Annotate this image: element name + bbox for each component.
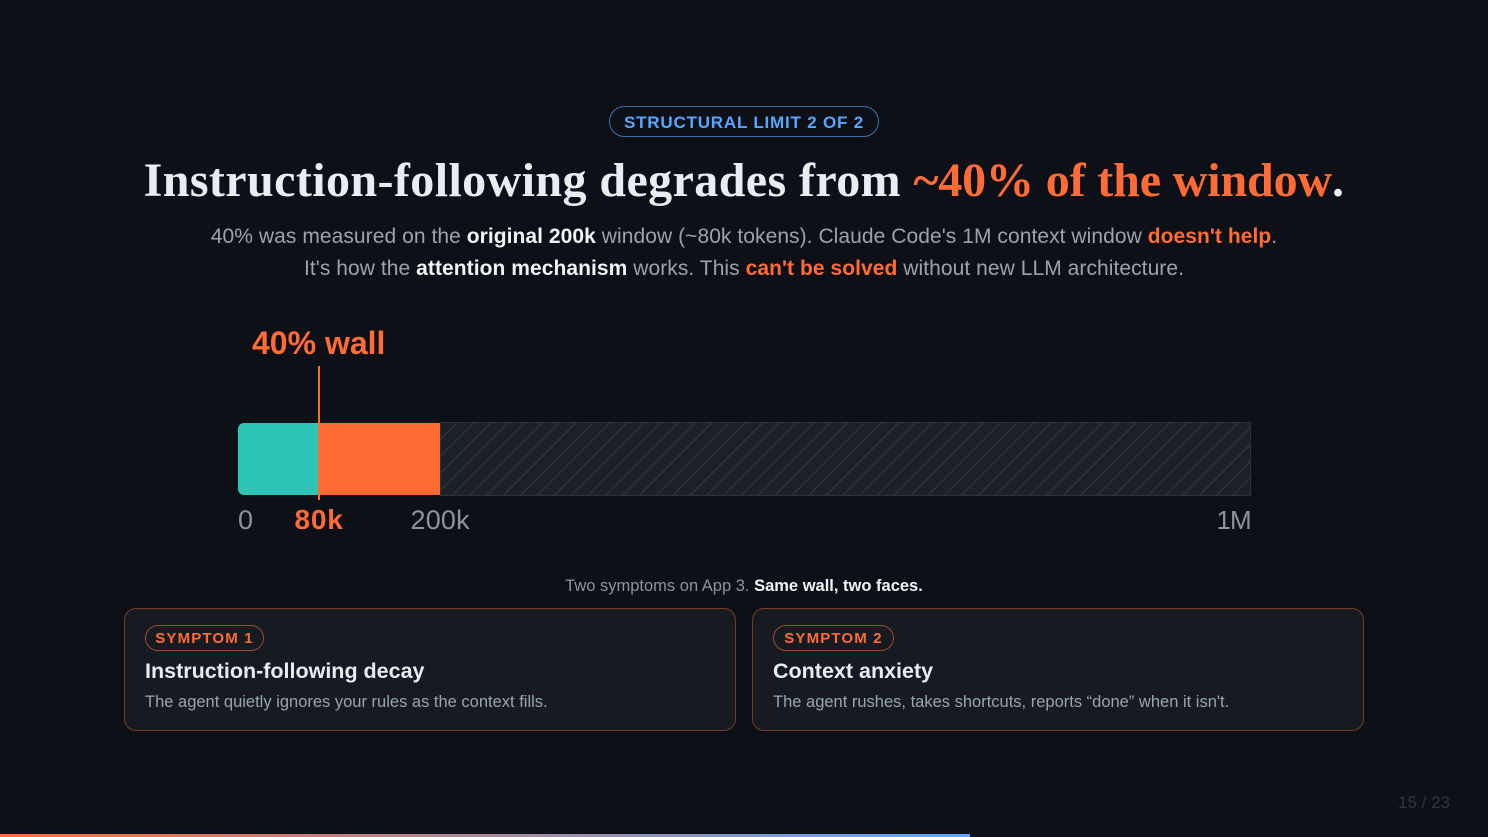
tag [145,625,264,651]
tag [773,625,894,651]
badge [609,106,879,137]
page number: 15 / 23 [1398,793,1450,812]
description: The agent quietly ignores your rules as the context fills. [145,693,548,711]
tag: SYMPTOM 2 [784,630,883,647]
symptoms caption: Two symptoms on App 3. Same wall, two faces. [565,577,923,595]
progress bar [0,834,970,837]
segment: degraded [318,423,440,495]
panel: symptom 1 [124,608,736,731]
tag: SYMPTOM 1 [155,630,254,647]
subtitle [211,225,1277,280]
axis label 1M: 1M [1216,505,1251,535]
title: Instruction-following degrades from ~40% of the window. [144,154,1344,207]
panel: symptom 2 [752,608,1364,731]
bar chart [238,325,1251,535]
wall label: 40% wall [252,325,385,361]
axis label 80k: 80k [294,504,344,535]
heading: Instruction-following decay [145,659,425,683]
subtitle: It's how the attention mechanism works. This can't be solved without new LLM architecture. [304,257,1184,280]
segment: healthy [238,423,318,495]
description: The agent rushes, takes shortcuts, reports “done” when it isn't. [773,693,1229,711]
axis label 0: 0 [238,505,253,535]
subtitle: 40% was measured on the original 200k window (~80k tokens). Claude Code's 1M context window doesn't help. [211,225,1277,248]
badge: STRUCTURAL LIMIT 2 OF 2 [624,113,864,132]
wall marker [318,366,320,500]
heading: Context anxiety [773,659,933,683]
unused capacity hatch [440,422,1251,496]
axis label 200k: 200k [410,505,470,535]
